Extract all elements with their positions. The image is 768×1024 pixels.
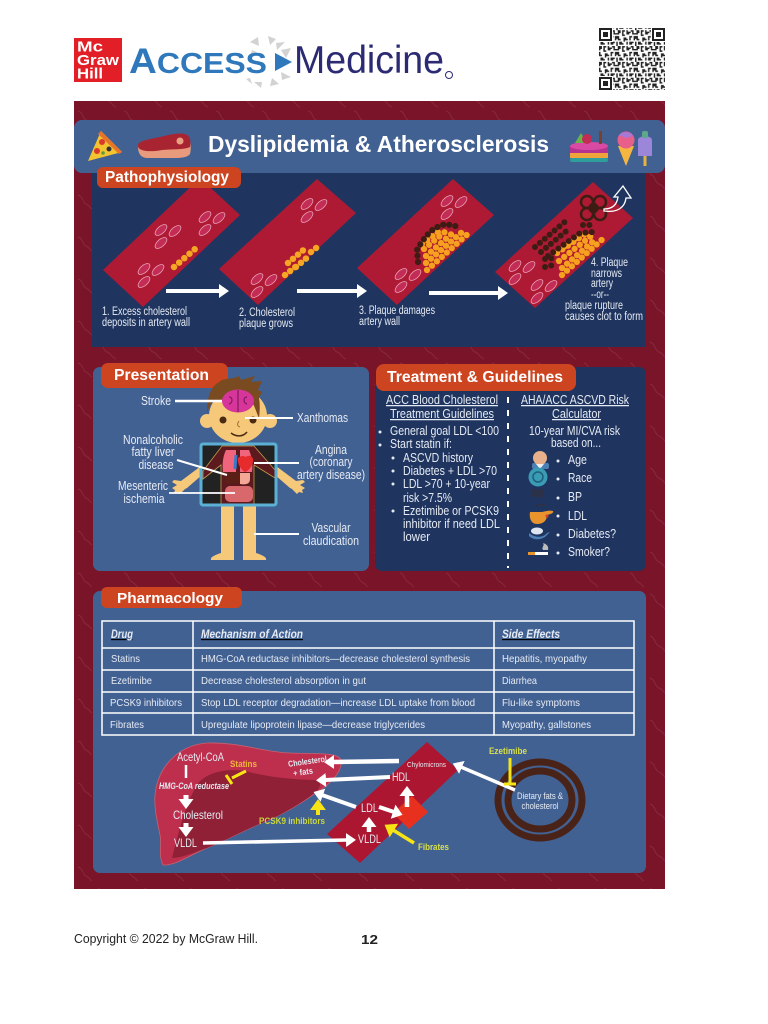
caption: step 1: deposits in artery wall	[102, 317, 190, 329]
arrow: HDL to liver	[325, 777, 390, 780]
icon: blood pressure	[531, 489, 545, 506]
liver	[155, 743, 341, 865]
divider	[507, 397, 509, 568]
text: dietary fats	[517, 791, 564, 812]
panel: presentation	[93, 363, 369, 571]
table row: PCSK9 inhibitors: PCSK9 inhibitors	[110, 697, 182, 709]
caption: step 4: --or--	[591, 289, 609, 301]
title text: Dyslipidemia & Atherosclerosis	[208, 131, 549, 157]
panel: treatment and guidelines	[375, 364, 646, 571]
icon: race	[528, 468, 548, 486]
text: liver labels: Cholesterol	[173, 808, 223, 822]
artery 3	[357, 179, 494, 305]
heading: treatment and guidelines	[376, 364, 576, 391]
table row: statins: Statins	[111, 653, 140, 665]
column: ASCVD risk calculator: Age	[568, 453, 587, 467]
table row: ezetimibe: Diarrhea	[502, 675, 537, 687]
table row: fibrates: Fibrates	[110, 719, 144, 731]
diagram: lipid pathway	[155, 742, 582, 865]
text: vessel labels: HDL	[392, 772, 410, 784]
panel: pharmacology	[93, 587, 646, 873]
caption: step 4: causes clot to form	[565, 311, 643, 323]
icon: cake	[570, 131, 608, 162]
column: ASCVD risk calculator: based on...	[551, 436, 601, 450]
icon: cigarette	[528, 543, 548, 555]
table header: Side Effects	[502, 627, 560, 641]
logo: AccessMedicine: ACCESS	[129, 42, 267, 81]
heading: treatment and guidelines: Treatment & Guidelines	[387, 369, 563, 386]
arrow: chylomicrons to liver	[333, 761, 399, 762]
callout: fatty liver: fatty liver	[132, 445, 174, 459]
title band	[74, 120, 665, 173]
icon: popsicle	[638, 131, 652, 166]
text: liver labels	[159, 750, 327, 850]
callout: fatty liver: disease	[138, 458, 174, 472]
column: ACC guidelines: Ezetimibe or PCSK9	[403, 504, 499, 518]
table row: PCSK9 inhibitors: Flu-like symptoms	[502, 697, 580, 709]
callout: mesenteric ischemia: Mesenteric	[118, 479, 168, 493]
table row: statins: HMG-CoA reductase inhibitors—decrease cholesterol synthesis	[201, 653, 470, 665]
text: vessel labels: Chylomicrons	[407, 760, 446, 769]
caption: step 1: 1. Excess cholesterol	[102, 306, 187, 318]
icon: sugar spoon	[529, 528, 550, 539]
inhibitor: statins	[226, 771, 246, 784]
organs	[223, 450, 253, 502]
icon: brain	[222, 390, 254, 412]
heading: pharmacology: Pharmacology	[117, 590, 224, 607]
callout: mesenteric ischemia: ischemia	[124, 492, 165, 506]
vessel	[327, 742, 458, 863]
callout: angina: Angina	[315, 443, 347, 457]
text: vessel labels: LDL	[361, 803, 378, 815]
callout: vascular claudication	[254, 521, 359, 548]
column: ASCVD risk calculator	[521, 393, 630, 559]
column: ACC guidelines	[378, 393, 500, 544]
column: ASCVD risk calculator: BP	[568, 490, 582, 504]
QR code	[598, 27, 666, 91]
heading: presentation: Presentation	[114, 367, 209, 384]
footer: page number: 12	[361, 932, 378, 947]
callout: fatty liver	[123, 433, 227, 475]
gut rings	[498, 762, 582, 838]
text: vessel labels: VLDL	[358, 834, 381, 846]
text: liver labels: Acetyl-CoA	[177, 750, 224, 764]
arms and legs	[172, 466, 305, 560]
callout: fatty liver: Nonalcoholic	[123, 433, 183, 447]
arrows: vessel conversions	[369, 795, 407, 832]
arrow: dietary fats to chylomicrons	[461, 767, 515, 790]
table row: ezetimibe	[111, 675, 537, 687]
table row: PCSK9 inhibitors: Stop LDL receptor degradation—increase LDL uptake from blood	[201, 697, 475, 709]
callout: vascular claudication: Vascular	[312, 521, 350, 535]
arrows: liver synthesis	[185, 765, 187, 828]
table: drugs	[102, 621, 634, 735]
column: ACC guidelines: inhibitor if need LDL	[403, 517, 500, 531]
callout: vascular claudication: claudication	[303, 534, 359, 548]
heading: presentation	[101, 363, 228, 388]
table row: fibrates: Myopathy, gallstones	[502, 719, 591, 731]
arrow: VLDL to vessel	[203, 840, 347, 843]
arrow: fibrates	[393, 830, 414, 843]
table header: Drug	[111, 627, 134, 641]
column: ASCVD risk calculator: Smoker?	[568, 545, 610, 559]
text: dietary fats: cholesterol	[522, 801, 558, 812]
table header: Mechanism of Action	[201, 627, 303, 641]
header: logos	[74, 27, 666, 91]
column: ASCVD risk calculator: 10-year MI/CVA risk	[529, 424, 621, 438]
logo: McGraw Hill: Graw	[77, 52, 119, 69]
table row: statins	[111, 653, 588, 665]
caption: step 2: 2. Cholesterol	[239, 307, 295, 319]
table row: PCSK9 inhibitors	[110, 697, 580, 709]
text: drug labels: Statins	[230, 759, 257, 770]
caption: step 3: artery wall	[359, 316, 400, 328]
callout: stroke	[141, 394, 222, 408]
illustration: child body with organs	[172, 376, 305, 560]
column: ACC guidelines: Diabetes + LDL >70	[403, 464, 497, 478]
logo: McGraw Hill	[74, 38, 122, 82]
arrow: step 1 to 2	[166, 289, 220, 293]
column: ACC guidelines: ASCVD history	[403, 451, 474, 465]
table header	[111, 627, 560, 641]
caption: step 4: 4. Plaque	[591, 257, 628, 269]
column: ACC guidelines: General goal LDL <100	[390, 424, 499, 438]
arrow: PCSK9 inhibitors	[316, 809, 320, 815]
callout: angina: artery disease)	[297, 468, 365, 482]
column: ACC guidelines: Start statin if:	[390, 437, 452, 451]
column: ASCVD risk calculator: Diabetes?	[568, 527, 616, 541]
logo: AccessMedicine: Medicine	[294, 39, 444, 82]
callout: stroke: Stroke	[141, 394, 171, 408]
arrow: LDL to liver	[322, 795, 356, 807]
text: liver labels: + fats	[292, 765, 314, 778]
torso window	[201, 444, 276, 505]
inhibitor: ezetimibe	[504, 758, 516, 784]
column: ACC guidelines: risk >7.5%	[403, 491, 452, 505]
column: ACC guidelines: lower	[403, 530, 430, 544]
table row: statins: Hepatitis, myopathy	[502, 653, 588, 665]
arrow: step 3 to 4	[429, 291, 499, 295]
footer: copyright: Copyright © 2022 by McGraw Hill.	[74, 932, 258, 946]
text: drug labels: Ezetimibe	[489, 746, 527, 757]
logo: McGraw Hill: Mc	[77, 38, 103, 56]
column: ASCVD risk calculator: LDL	[568, 509, 587, 523]
arrow: clot embolizes	[604, 186, 631, 211]
column: ACC guidelines: ACC Blood Cholesterol	[386, 393, 498, 407]
arrow: step 2 to 3	[297, 289, 358, 293]
caption: step 4: plaque rupture	[565, 300, 623, 312]
text: drug labels: PCSK9 inhibitors	[259, 816, 325, 827]
callout: mesenteric ischemia	[118, 479, 235, 506]
caption: step 4: narrows	[591, 268, 622, 280]
column: ASCVD risk calculator: AHA/ACC ASCVD Risk	[521, 393, 630, 407]
text: vessel labels	[358, 760, 446, 846]
icon: LDL finger	[530, 511, 553, 524]
table row: ezetimibe: Decrease cholesterol absorption in gut	[201, 675, 366, 687]
heading: pharmacology	[101, 587, 242, 608]
infographic background	[74, 101, 665, 889]
text: drug labels	[230, 746, 527, 853]
column: ACC guidelines: Treatment Guidelines	[390, 407, 494, 421]
column: ACC guidelines: LDL >70 + 10-year	[403, 477, 490, 491]
text: liver labels: VLDL	[174, 836, 197, 850]
callout: xanthomas	[245, 411, 348, 425]
icon: clot	[581, 196, 606, 220]
text: drug labels: Fibrates	[418, 842, 449, 853]
artery 4	[495, 182, 633, 308]
text: liver labels: Cholesterol	[287, 754, 327, 769]
lipoprotein lipase diamond	[393, 796, 428, 829]
text: liver labels: HMG-CoA reductase	[159, 781, 229, 791]
panel: pathophysiology	[92, 173, 646, 347]
text: dietary fats: Dietary fats &	[517, 791, 564, 802]
column: ASCVD risk calculator: Race	[568, 471, 592, 485]
table row: ezetimibe: Ezetimibe	[111, 675, 152, 687]
heading: pathophysiology: Pathophysiology	[105, 169, 229, 186]
head	[200, 376, 277, 443]
table row: fibrates: Upregulate lipoprotein lipase—decrease triglycerides	[201, 719, 425, 731]
logo: AccessMedicine	[129, 36, 452, 88]
artery 2	[219, 179, 356, 305]
callout: angina: (coronary	[310, 455, 353, 469]
caption: step 3: 3. Plaque damages	[359, 305, 435, 317]
icon: age	[532, 451, 549, 469]
artery 1	[103, 178, 240, 307]
logo: McGraw Hill: Hill	[77, 66, 103, 82]
icon: ice cream	[618, 132, 634, 166]
callout: angina	[254, 443, 365, 482]
callout: xanthomas: Xanthomas	[297, 411, 348, 425]
caption: step 2: plaque grows	[239, 318, 293, 330]
caption: step 4: artery	[591, 278, 613, 290]
icon: steak	[138, 133, 191, 158]
column: ASCVD risk calculator: Calculator	[552, 407, 601, 421]
table row: fibrates	[110, 719, 591, 731]
icon: pizza	[88, 131, 122, 161]
